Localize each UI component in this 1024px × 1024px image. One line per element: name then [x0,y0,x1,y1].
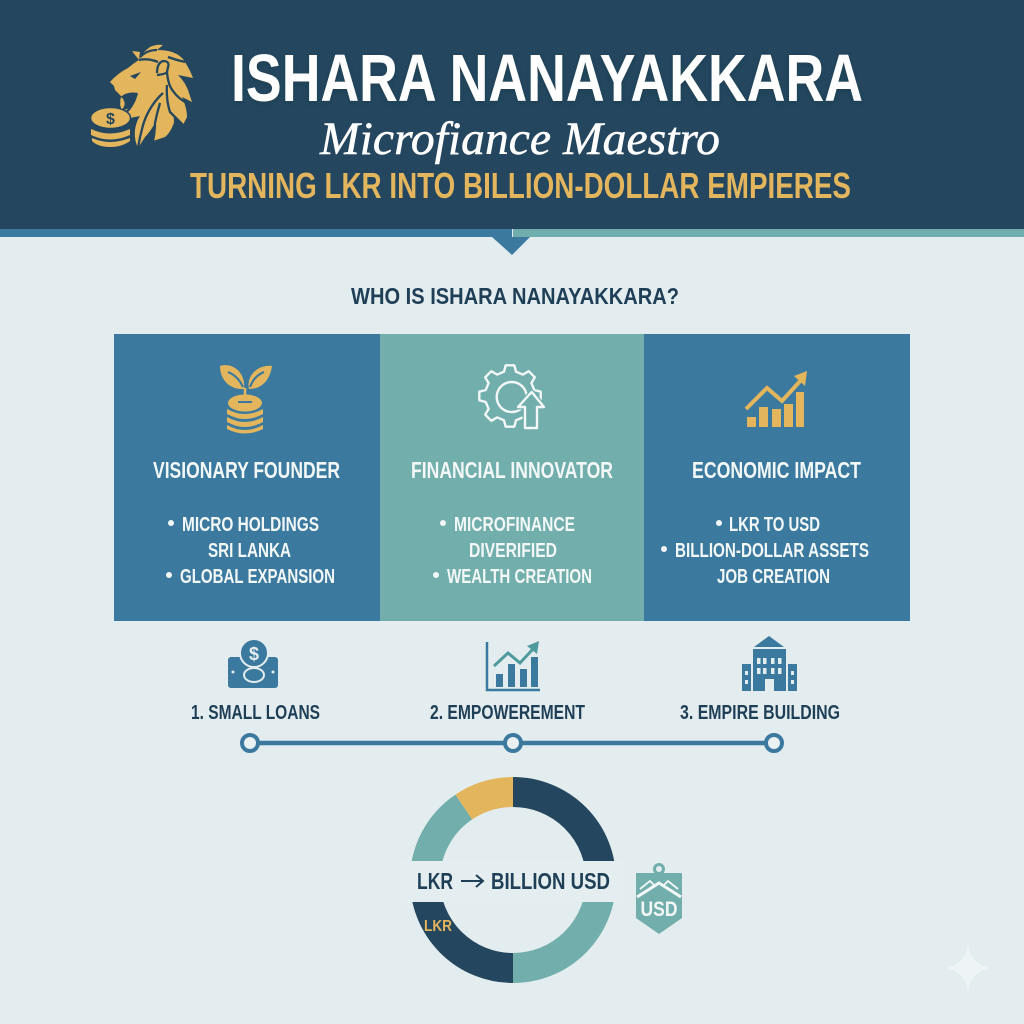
icon: sprout on coins [220,365,272,434]
icon: banknote with coin: $ [249,644,259,664]
bullet list: GLOBAL EXPANSION [180,566,335,588]
panel: financial innovator [380,334,644,621]
heading: FINANCIAL INNOVATOR [411,457,613,483]
icon: USD tag: USD [640,898,678,921]
bullet list [661,514,869,588]
timeline line with nodes [242,735,782,751]
step 1: small loans [191,639,320,724]
heading: VISIONARY FOUNDER [153,457,340,483]
header banner [0,0,1024,255]
bullet list: MICRO HOLDINGS [182,514,319,536]
donut center label: BILLION USD [491,868,610,894]
subtitle: Microfiance Maestro [319,113,720,165]
donut center label [417,868,610,894]
step 2: empowerement [430,641,585,724]
section heading: WHO IS ISHARA NANAYAKKARA? [351,283,679,309]
bullet list: DIVERIFIED [469,540,557,562]
label: 3. EMPIRE BUILDING [680,702,840,724]
bullet list: SRI LANKA [208,540,291,562]
bullet list [433,514,592,588]
panel: economic impact [644,334,910,621]
heading: ECONOMIC IMPACT [692,457,861,483]
bullet list [166,514,335,588]
LKR segment label: LKR [424,918,452,935]
icon: office building [742,636,797,691]
bullet list: MICROFINANCE [454,514,575,536]
icon: gear with arrow [479,365,544,428]
panel: visionary founder [114,334,380,621]
step 3: empire building [680,636,840,724]
tagline: TURNING LKR INTO BILLION-DOLLAR EMPIERES [190,165,851,206]
icon: lion with coins [90,45,193,148]
bullet list: LKR TO USD [729,514,820,536]
icon: USD tag [636,864,682,934]
title: ISHARA NANAYAKKARA [231,41,863,116]
bullet list: JOB CREATION [717,566,830,588]
donut center label: LKR [417,868,453,894]
label: 1. SMALL LOANS [191,702,320,724]
process timeline [191,636,840,751]
bullet list: WEALTH CREATION [447,566,592,588]
label: 2. EMPOWEREMENT [430,702,585,724]
icon: lion with coins: $ [106,111,115,128]
bullet list: BILLION-DOLLAR ASSETS [675,540,869,562]
icon: sparkle [945,945,991,991]
icon: growth chart [487,641,540,690]
donut chart [400,792,626,968]
icon: rising bar chart [746,371,807,427]
